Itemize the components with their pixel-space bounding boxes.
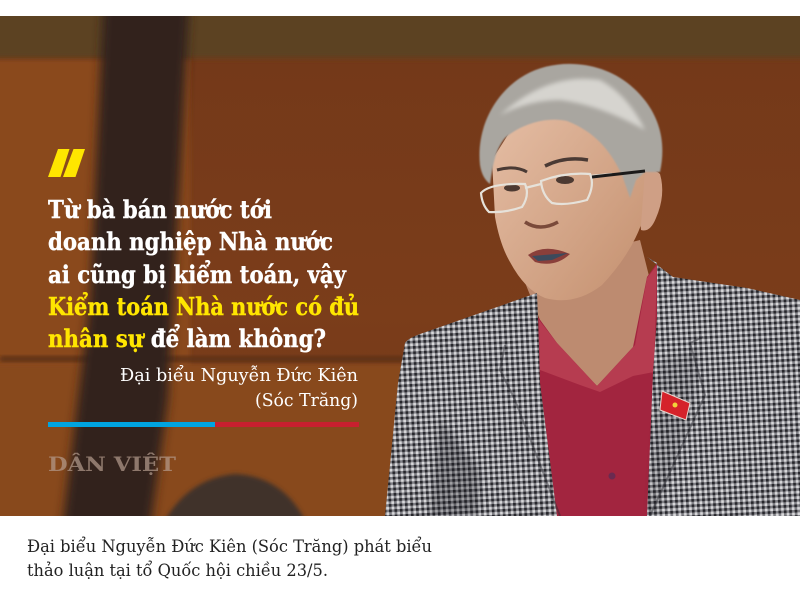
eyebrows, nose and eyes <box>497 159 588 227</box>
logo: Dan Viet: DÂN VIỆT <box>48 451 176 476</box>
quote text: Kiểm toán Nhà nước có đủ <box>48 292 359 321</box>
jacket shading and lapels <box>430 337 705 516</box>
shirt button <box>608 472 616 480</box>
quote mark <box>48 149 85 177</box>
delegate badge <box>660 391 690 420</box>
quote text: doanh nghiệp Nhà nước <box>48 227 333 256</box>
mouth <box>528 249 570 264</box>
glasses <box>481 171 645 212</box>
quote text: Từ bà bán nước tới <box>48 195 272 224</box>
attribution <box>120 364 358 411</box>
speaker portrait <box>385 64 800 516</box>
ear <box>640 171 662 230</box>
foreground head silhouette <box>165 474 305 520</box>
quote text: ai cũng bị kiểm toán, vậy <box>48 260 347 289</box>
neck <box>520 240 650 386</box>
jacket right <box>647 257 800 516</box>
hair <box>479 64 662 198</box>
attribution: Đại biểu Nguyễn Đức Kiên <box>120 364 358 386</box>
shirt <box>538 263 657 516</box>
quote text <box>48 195 359 353</box>
jacket left <box>385 293 557 516</box>
face <box>492 118 642 300</box>
photo caption <box>27 537 432 581</box>
photo caption: thảo luận tại tổ Quốc hội chiều 23/5. <box>27 561 328 581</box>
quote text: nhân sự để làm không? <box>48 324 326 353</box>
two-colour divider <box>48 422 359 427</box>
photo caption: Đại biểu Nguyễn Đức Kiên (Sóc Trăng) phát biểu <box>27 537 432 557</box>
attribution: (Sóc Trăng) <box>255 390 358 411</box>
